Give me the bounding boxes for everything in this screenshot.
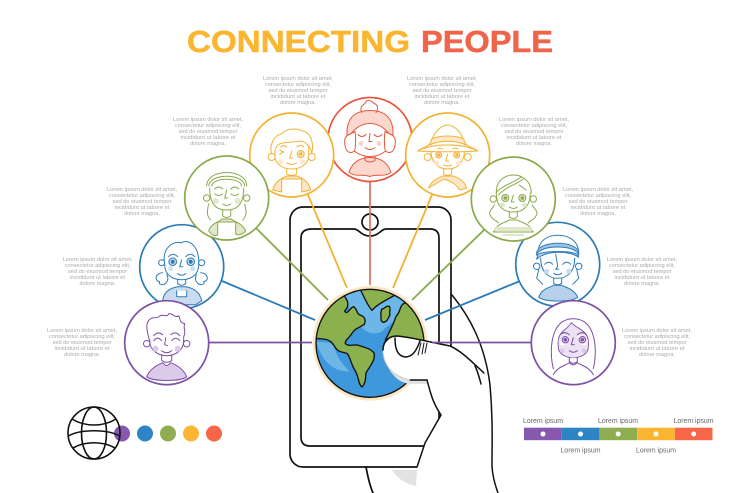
avatar: red circle xyxy=(328,98,412,182)
avatar: yellow right circle xyxy=(406,113,490,197)
text block: green left: dolore magna. xyxy=(124,211,160,217)
text block: blue right: dolore magna. xyxy=(624,281,660,287)
text block: yellow left: sed do eiusmod tempor xyxy=(178,129,238,135)
avatar: green right circle xyxy=(471,157,555,241)
text block: green left xyxy=(107,187,177,217)
text block: blue right: Lorem ipsum dolor sit amet, xyxy=(607,257,677,263)
text block: yellow right: sed do eiusmod tempor xyxy=(504,129,564,135)
text block: top right: incididunt ut labore et xyxy=(414,94,470,100)
text block: top right: Lorem ipsum dolor sit amet, xyxy=(407,76,477,82)
text block: top left: Lorem ipsum dolor sit amet, xyxy=(263,76,333,82)
avatar: purple right circle xyxy=(531,301,615,385)
text block: purple right xyxy=(622,328,692,358)
text block: purple right: consectetur adipiscing elit, xyxy=(624,334,690,340)
text block: top right: sed do eiusmod tempor xyxy=(412,88,472,94)
text block: green right xyxy=(563,187,633,217)
text block: top left: dolore magna. xyxy=(280,100,316,106)
text block: top right: dolore magna. xyxy=(424,100,460,106)
legend bar: Lorem ipsum xyxy=(636,448,676,454)
text block: purple left: dolore magna. xyxy=(64,352,100,358)
text block: purple left: consectetur adipiscing elit, xyxy=(49,334,115,340)
text block: purple right: incididunt ut labore et xyxy=(630,346,685,352)
colour dots xyxy=(114,426,222,442)
text block: blue right: sed do eiusmod tempor xyxy=(612,269,672,275)
text block: blue right: incididunt ut labore et xyxy=(614,275,670,281)
text block: blue left: Lorem ipsum dolor sit amet, xyxy=(62,257,133,263)
text block: blue left xyxy=(62,257,133,287)
text block: green right: Lorem ipsum dolor sit amet, xyxy=(563,187,633,193)
legend bar: Lorem ipsum xyxy=(674,418,714,425)
text block: purple left: Lorem ipsum dolor sit amet, xyxy=(47,328,117,334)
globe xyxy=(308,285,430,401)
text block: purple left: sed do eiusmod tempor xyxy=(52,340,112,346)
text block: purple right: Lorem ipsum dolor sit amet, xyxy=(622,328,692,334)
text block: top left: incididunt ut labore et xyxy=(270,94,326,100)
text block: blue left: sed do eiusmod tempor xyxy=(68,269,127,275)
text block: yellow left xyxy=(173,117,243,147)
text block: yellow left: consectetur adipiscing elit, xyxy=(175,123,241,129)
legend bar: Lorem ipsum xyxy=(523,418,563,425)
text block: green left: incididunt ut labore et xyxy=(114,205,170,211)
avatar: blue right circle xyxy=(516,222,600,306)
avatar: green left circle xyxy=(185,156,269,240)
text block: green left: Lorem ipsum dolor sit amet, xyxy=(107,187,177,193)
text block: yellow right: dolore magna. xyxy=(516,141,552,147)
text block: green right: sed do eiusmod tempor xyxy=(568,199,628,205)
text block: top right xyxy=(407,76,477,106)
avatar: purple left circle xyxy=(125,301,209,385)
text block: green right: dolore magna. xyxy=(580,211,616,217)
text block: blue right: consectetur adipiscing elit, xyxy=(609,263,675,269)
title: CONNECTING xyxy=(187,25,410,59)
text block: top left: sed do eiusmod tempor xyxy=(268,88,328,94)
hand shadow xyxy=(383,352,443,486)
text block: purple left: incididunt ut labore et xyxy=(54,346,110,352)
text block: top left: consectetur adipiscing elit, xyxy=(265,82,331,88)
connector lines over hand xyxy=(425,281,532,342)
connector lines xyxy=(209,181,485,342)
text block: purple left xyxy=(47,328,117,358)
text block: yellow right: Lorem ipsum dolor sit amet, xyxy=(499,117,569,123)
text block: blue left: consectetur adipiscing elit, xyxy=(64,263,131,269)
text block: yellow right: consectetur adipiscing elit, xyxy=(501,123,567,129)
text block: top left xyxy=(263,76,333,106)
text block: top right: consectetur adipiscing elit, xyxy=(409,82,475,88)
title: PEOPLE xyxy=(421,25,553,59)
text block: green left: consectetur adipiscing elit, xyxy=(109,193,175,199)
legend bar: Lorem ipsum xyxy=(560,448,601,454)
text block: yellow left: dolore magna. xyxy=(190,141,226,147)
text block: blue left: incididunt ut labore et xyxy=(70,275,125,281)
hand xyxy=(366,295,498,493)
title xyxy=(187,25,553,59)
avatar: blue left circle xyxy=(140,225,224,309)
text block: blue right xyxy=(607,257,677,287)
text block: green right: consectetur adipiscing elit, xyxy=(565,193,631,199)
text block: yellow right xyxy=(499,117,569,147)
text block: yellow left: incididunt ut labore et xyxy=(180,135,236,141)
avatar: yellow left circle xyxy=(250,113,334,197)
text block: green left: sed do eiusmod tempor xyxy=(112,199,172,205)
text block: purple right: sed do eiusmod tempor xyxy=(628,340,687,346)
legend bar: Lorem ipsum xyxy=(598,418,638,425)
text block: green right: incididunt ut labore et xyxy=(570,205,626,211)
icon: wireframe globe xyxy=(68,407,120,459)
phone xyxy=(290,207,451,467)
legend bar xyxy=(523,418,714,454)
text block: yellow right: incididunt ut labore et xyxy=(506,135,562,141)
text block: blue left: dolore magna. xyxy=(80,281,116,287)
text block: yellow left: Lorem ipsum dolor sit amet, xyxy=(173,117,243,123)
text block: purple right: dolore magna. xyxy=(639,352,675,358)
